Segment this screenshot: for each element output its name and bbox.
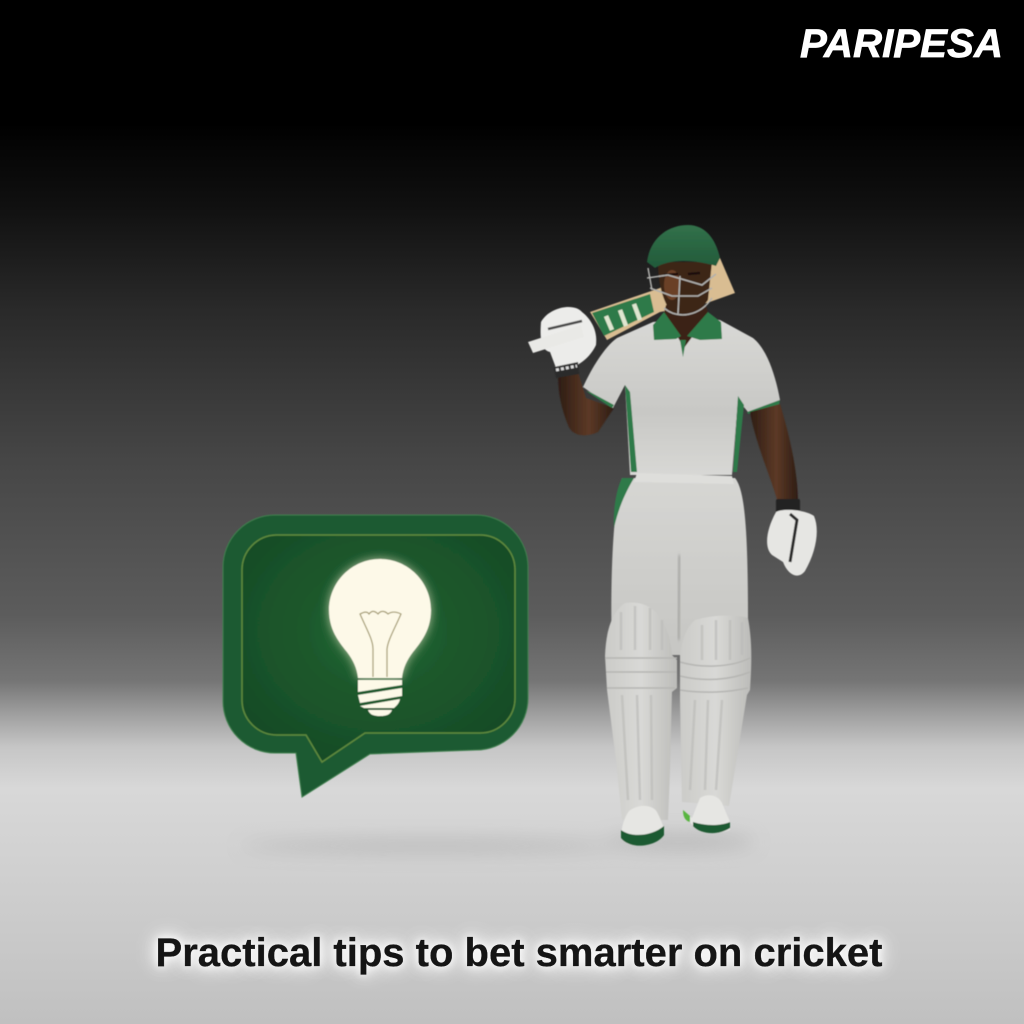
batting glove hanging [767, 499, 817, 576]
face [658, 262, 712, 314]
trouser waistband and green stripe [614, 473, 734, 640]
speech bubble with lightbulb [223, 515, 528, 797]
bubble body [223, 515, 528, 797]
batting glove raised [528, 307, 596, 378]
right arm [750, 404, 798, 503]
left leg pad [605, 603, 677, 820]
lightbulb icon [329, 559, 431, 716]
trousers [611, 478, 748, 655]
helmet [647, 225, 720, 268]
neck [660, 305, 712, 348]
cricket bat [590, 258, 735, 340]
cricket player [528, 225, 817, 846]
face guard [647, 268, 716, 315]
left shoe [621, 806, 664, 846]
shirt green side panels [586, 385, 780, 472]
shirt [583, 318, 780, 475]
shirt collar [653, 312, 722, 357]
right leg pad [680, 616, 751, 806]
right shoe [683, 795, 730, 833]
raised arm [558, 372, 614, 435]
headline: Practical tips to bet smarter on cricket [156, 931, 882, 975]
bubble inner panel [242, 535, 515, 762]
floor shadows [240, 833, 755, 853]
